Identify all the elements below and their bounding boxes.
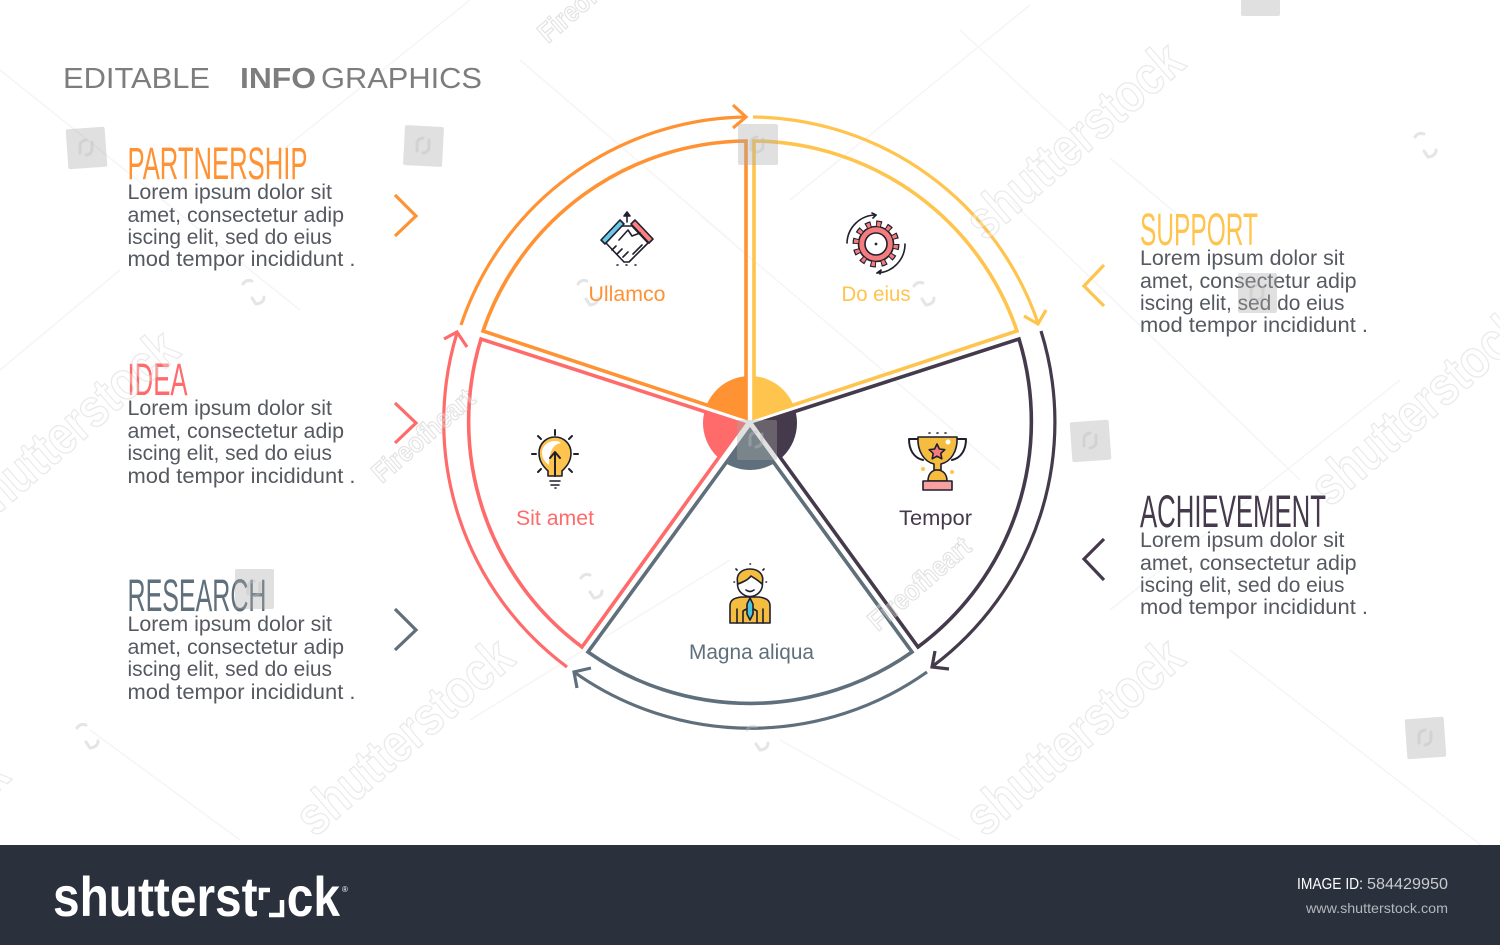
watermarks: Fireofheart [862, 530, 977, 637]
text block: achievement: amet, consectetur adip [1140, 552, 1356, 575]
watermarks: Fireofheart [366, 382, 481, 489]
label: Tempor: Tempor [899, 507, 972, 530]
segment: dark purple wedge [756, 339, 1031, 647]
arrow: idea chevron [395, 403, 416, 443]
watermarks: shutterstock [954, 625, 1196, 847]
text block: partnership: amet, consectetur adip [128, 204, 344, 227]
text block: support: mod tempor incididunt . [1140, 314, 1368, 337]
icon: light bulb [532, 430, 578, 488]
segment: orange wedge [483, 141, 746, 418]
text block: partnership: mod tempor incididunt . [128, 248, 356, 271]
text block: research [128, 570, 356, 704]
text block: achievement: mod tempor incididunt . [1140, 596, 1368, 619]
website url: www.shutterstock.com [1305, 900, 1448, 916]
logo: shutterstock: ® [342, 885, 348, 894]
icon: gear [847, 213, 905, 274]
logo: shutterstock: shutterstock [53, 865, 341, 928]
text block: idea: Lorem ipsum dolor sit [128, 397, 332, 420]
label: Ullamco: Ullamco [588, 283, 666, 306]
image id: IMAGE ID: [1297, 876, 1363, 893]
text block: support [1140, 204, 1368, 337]
text block: research: iscing elit, sed do eius [128, 658, 332, 681]
text block: support: Lorem ipsum dolor sit [1140, 247, 1345, 270]
text block: support: SUPPORT [1140, 204, 1258, 255]
footer bar [0, 845, 1500, 945]
title: INFO [240, 63, 316, 95]
text block: idea: mod tempor incididunt . [128, 465, 356, 488]
text block: partnership: iscing elit, sed do eius [128, 226, 332, 249]
text block: idea: IDEA [128, 354, 188, 405]
text block: achievement [1140, 486, 1368, 619]
text block: achievement: iscing elit, sed do eius [1140, 574, 1344, 597]
text block: research: mod tempor incididunt . [128, 681, 356, 704]
title [63, 63, 482, 95]
arrow: research chevron [395, 609, 416, 650]
arrow: achievement chevron [1084, 539, 1104, 580]
text block: partnership [128, 138, 356, 271]
arrow: support chevron [1084, 265, 1104, 306]
arrow: slate outer arc [574, 668, 927, 728]
watermarks: shutterstock [954, 29, 1196, 251]
image id [1297, 876, 1448, 893]
label: Do eius: Do eius [842, 283, 910, 306]
text block: idea: amet, consectetur adip [128, 420, 344, 443]
text block: research: Lorem ipsum dolor sit [128, 613, 332, 636]
text block: partnership: Lorem ipsum dolor sit [128, 181, 332, 204]
label: Sit amet: Sit amet [516, 507, 594, 530]
image id: 584429950 [1367, 876, 1448, 893]
label: Magna aliqua: Magna aliqua [689, 641, 814, 664]
arrow: red outer arc [444, 332, 567, 667]
text block: research: RESEARCH [128, 570, 266, 621]
text block: achievement: ACHIEVEMENT [1140, 486, 1326, 537]
title: GRAPHICS [321, 63, 482, 95]
arrow: yellow outer arc [753, 117, 1046, 324]
text block: partnership: PARTNERSHIP [128, 138, 308, 189]
title: EDITABLE [63, 63, 210, 95]
text block: idea [128, 354, 356, 488]
watermarks: shutterstock [284, 625, 526, 847]
arrow: partnership chevron [395, 195, 416, 236]
icon: person [730, 564, 770, 623]
icon: trophy [909, 433, 966, 490]
arrow: purple outer arc [932, 331, 1055, 669]
segment: red wedge [469, 339, 743, 647]
segment: slate wedge [588, 430, 912, 703]
central hub [703, 376, 797, 470]
text block: research: amet, consectetur adip [128, 636, 344, 659]
arrow: orange outer arc [461, 105, 746, 325]
segment: yellow wedge [754, 141, 1017, 418]
text block: idea: iscing elit, sed do eius [128, 442, 332, 465]
text block: achievement: Lorem ipsum dolor sit [1140, 529, 1345, 552]
text block: support: amet, consectetur adip [1140, 270, 1356, 293]
icon: handshake [601, 212, 653, 265]
text block: support: iscing elit, sed do eius [1140, 292, 1344, 315]
